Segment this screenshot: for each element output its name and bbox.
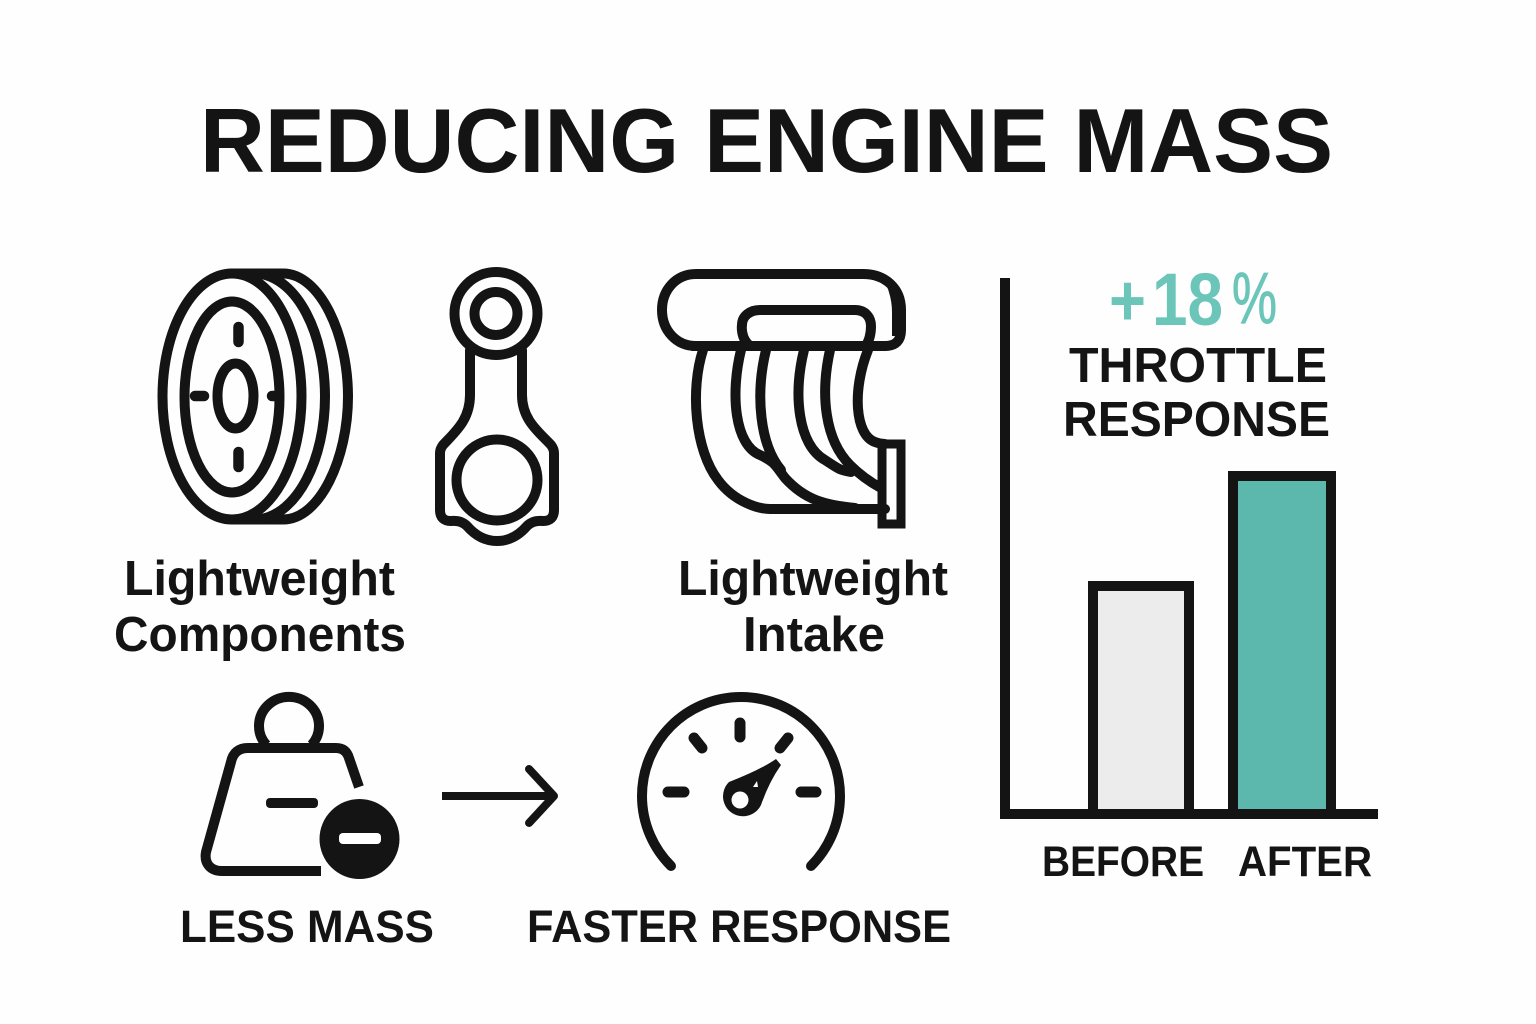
label: less mass: LESS MASS (180, 901, 434, 952)
stat: +18%: + (1109, 261, 1146, 341)
label: lightweight intake (678, 552, 948, 662)
icon: weight with minus badge (206, 697, 400, 879)
heading: throttle response (1063, 339, 1330, 447)
heading: throttle response: THROTTLE (1069, 339, 1327, 393)
bar chart: throttle response before and after (1005, 278, 1378, 886)
heading: throttle response: RESPONSE (1063, 393, 1330, 447)
icon: intake manifold (662, 274, 901, 524)
axis label: after: AFTER (1238, 838, 1372, 886)
label: lightweight components: Lightweight (124, 552, 395, 606)
title: REDUCING ENGINE MASS (200, 91, 1333, 192)
bar: before (1093, 586, 1189, 814)
arrow: less mass to faster response (442, 769, 554, 823)
chart axes (1005, 278, 1378, 814)
icon: flywheel (162, 274, 348, 520)
label: lightweight intake: Lightweight (678, 552, 948, 606)
label: lightweight components (114, 552, 406, 662)
label: lightweight intake: Intake (743, 608, 885, 662)
label: lightweight components: Components (114, 608, 406, 662)
stat: +18%: 18 (1152, 258, 1223, 341)
stat: +18%: % (1232, 259, 1277, 339)
axis label: before: BEFORE (1042, 838, 1204, 886)
icon: speedometer gauge (642, 697, 840, 866)
icon: connecting rod (440, 272, 554, 541)
stat: +18% (1109, 258, 1277, 341)
bar: after (1233, 476, 1331, 814)
label: faster response: FASTER RESPONSE (527, 901, 951, 952)
